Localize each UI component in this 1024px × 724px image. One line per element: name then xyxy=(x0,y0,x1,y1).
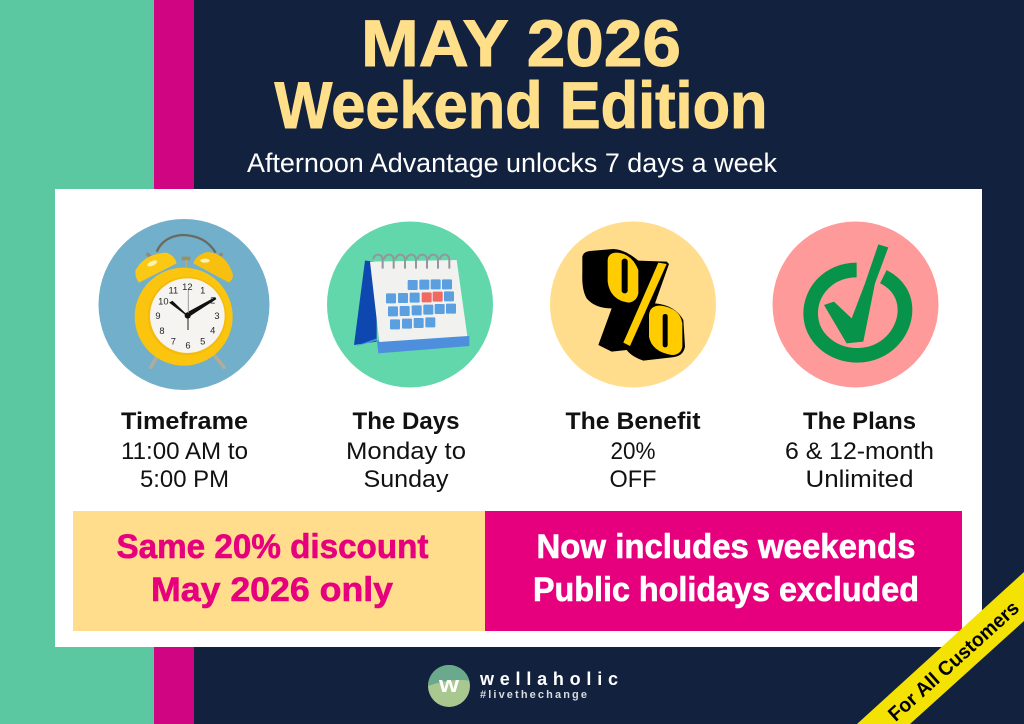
column: the plans: The Plans xyxy=(803,408,916,435)
panel: discount banner xyxy=(73,511,485,631)
icon: alarm clock: 6 xyxy=(185,341,191,351)
panel: main white card xyxy=(55,189,982,647)
icon: green check mark xyxy=(772,222,938,388)
panel: weekends banner xyxy=(485,511,962,631)
panel: discount banner: Same 20% discount xyxy=(116,528,428,566)
icon: alarm clock: 8 xyxy=(159,326,165,336)
column: the benefit: 20% xyxy=(610,438,656,465)
logo: wellaholic xyxy=(428,665,618,707)
column: the days: Sunday xyxy=(364,466,448,493)
column: timeframe xyxy=(121,408,248,493)
icon: alarm clock: 1 xyxy=(200,286,205,296)
title: MAY 2026 xyxy=(361,6,681,80)
column: the benefit: The Benefit xyxy=(566,408,700,435)
column: the plans: 6 & 12-month xyxy=(785,438,934,465)
column: timeframe: 11:00 AM to xyxy=(121,438,248,465)
column: timeframe: Timeframe xyxy=(121,408,248,435)
icon: alarm clock: 11 xyxy=(168,286,178,296)
icon: alarm clock: 3 xyxy=(214,311,220,321)
icon: alarm clock: 9 xyxy=(155,311,161,321)
column: the days: Monday to xyxy=(346,438,466,465)
panel: discount banner: May 2026 only xyxy=(151,571,393,609)
column: the plans: Unlimited xyxy=(806,466,914,493)
icon: alarm clock xyxy=(98,219,270,390)
logo: wellaholic: wellaholic xyxy=(479,669,618,689)
column: the plans xyxy=(785,408,934,493)
logo: wellaholic: #livethechange xyxy=(480,689,587,701)
icon: percent sign xyxy=(550,222,716,388)
column: the benefit: OFF xyxy=(610,466,656,493)
icon: alarm clock: 4 xyxy=(210,325,215,335)
title xyxy=(274,6,768,142)
icon: alarm clock: 2 xyxy=(210,296,215,306)
icon: alarm clock: 7 xyxy=(171,337,176,347)
icon: alarm clock: 12 xyxy=(182,282,193,292)
column: the benefit xyxy=(566,408,700,493)
column: timeframe: 5:00 PM xyxy=(140,466,229,493)
column: the days: The Days xyxy=(352,408,460,435)
title: Weekend Edition xyxy=(274,68,768,142)
panel: weekends banner: Public holidays excluded xyxy=(533,571,919,609)
subtitle: Afternoon Advantage unlocks 7 days a week xyxy=(247,148,777,178)
icon: alarm clock: 10 xyxy=(158,297,169,307)
icon: alarm clock: 5 xyxy=(200,337,205,347)
icon: desk calendar xyxy=(327,222,493,388)
panel: weekends banner: Now includes weekends xyxy=(536,528,916,566)
logo: wellaholic: w xyxy=(438,672,460,697)
column: the days xyxy=(346,408,466,493)
